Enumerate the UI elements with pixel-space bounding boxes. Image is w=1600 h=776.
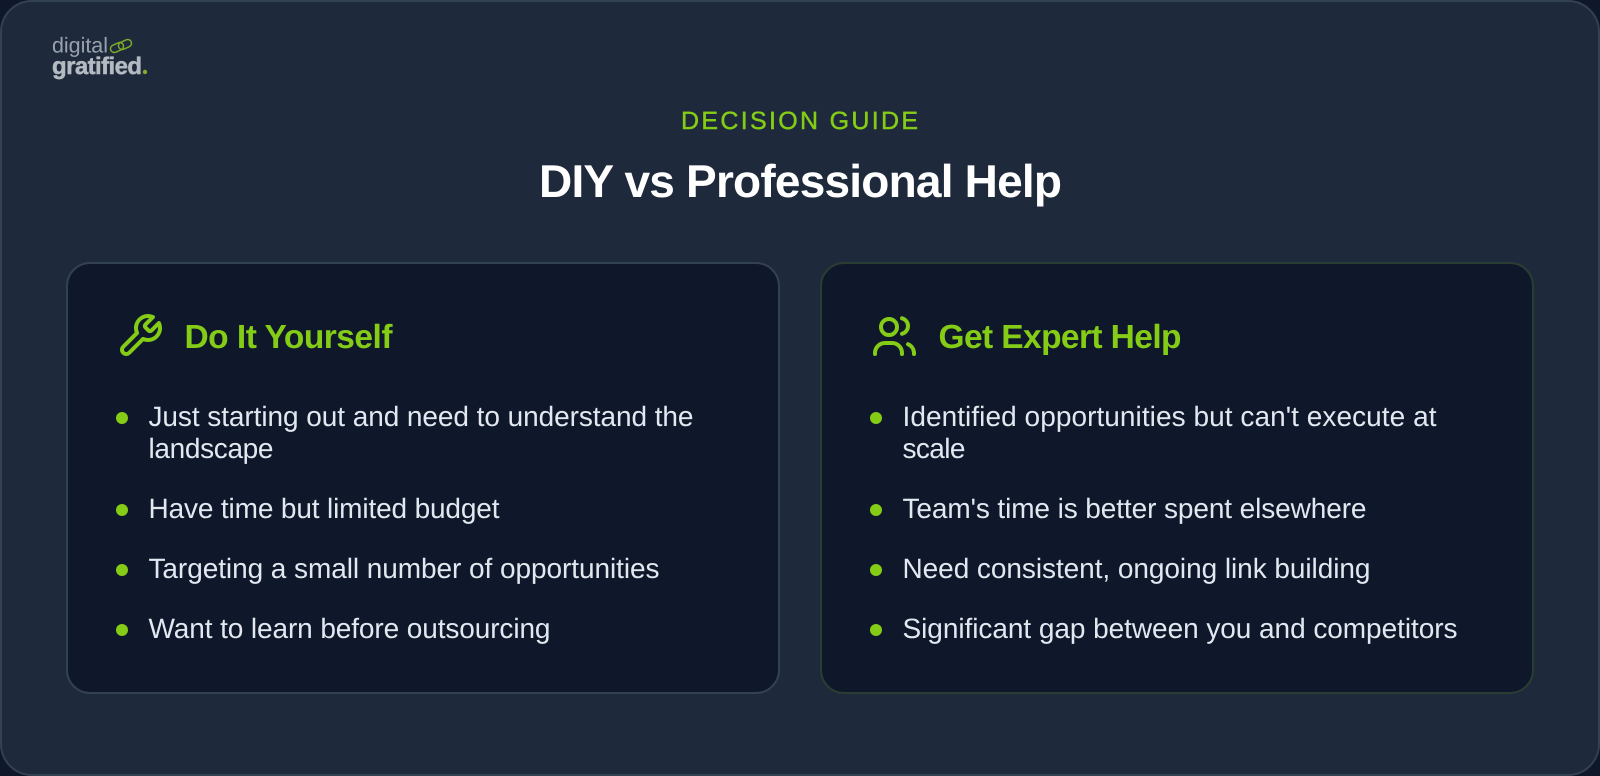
panel background — [821, 263, 1533, 693]
logo dot — [143, 70, 147, 74]
list item 1 — [116, 401, 694, 464]
heading: Get Expert Help — [938, 319, 1182, 356]
panel background — [67, 263, 779, 693]
logo wordmark: gratified: gratified — [52, 53, 142, 80]
logo wordmark: digital: digital — [52, 34, 108, 58]
list item 3: Need consistent, ongoing link building — [902, 553, 1370, 584]
panel: do it yourself — [67, 263, 779, 693]
list item 1: Identified opportunities but can't execute at — [902, 401, 1437, 432]
logo — [52, 34, 147, 80]
heading: Do It Yourself — [184, 319, 393, 356]
list item 4: Want to learn before outsourcing — [148, 613, 550, 644]
eyebrow: DECISION GUIDE — [681, 107, 918, 135]
list item 1 — [870, 401, 1437, 464]
list item 2: Have time but limited budget — [148, 493, 500, 524]
list item 1: scale — [902, 433, 966, 464]
panel: get expert help — [821, 263, 1533, 693]
list item 3: Targeting a small number of opportunities — [148, 553, 660, 584]
logo icon: chain link — [109, 38, 133, 54]
list item 1: landscape — [148, 433, 274, 464]
list item 1: Just starting out and need to understand the — [148, 401, 694, 432]
title: DIY vs Professional Help — [539, 155, 1062, 207]
list item 2: Team's time is better spent elsewhere — [902, 493, 1366, 524]
icon: wrench — [122, 316, 160, 354]
list item 4: Significant gap between you and competitors — [902, 613, 1458, 644]
icon: users — [875, 318, 914, 354]
